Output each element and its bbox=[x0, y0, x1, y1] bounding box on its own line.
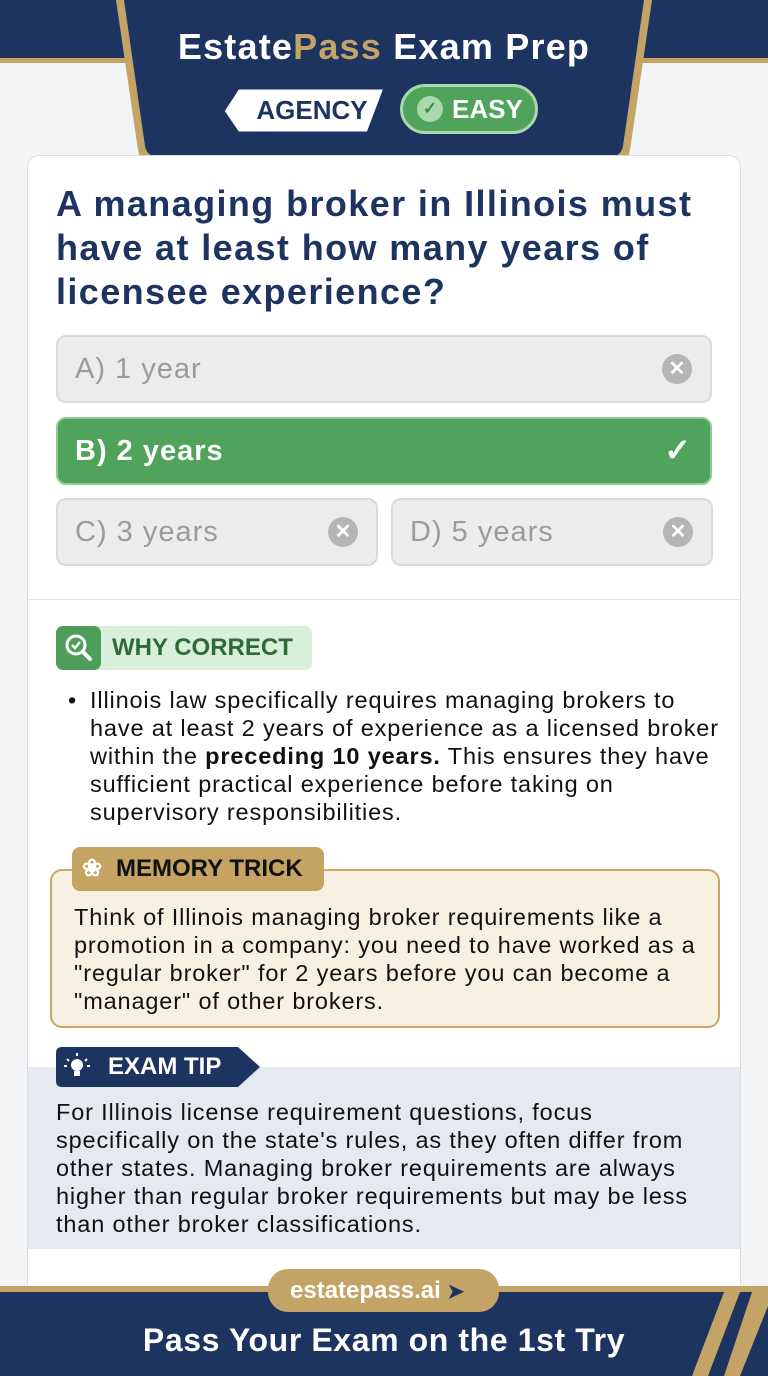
footer url pill: estatepass.ai ➤ bbox=[290, 1277, 464, 1304]
tag: agency: AGENCY bbox=[256, 95, 368, 125]
exam tip section: higher than regular broker requirements but may be less bbox=[56, 1183, 688, 1209]
option B correct: ✓ bbox=[664, 432, 692, 468]
exam tip section: than other broker classifications. bbox=[56, 1211, 422, 1237]
option A: ✕ bbox=[669, 358, 685, 380]
why correct text: within the preceding 10 years. This ensures they have bbox=[90, 743, 709, 769]
question: licensee experience? bbox=[56, 271, 446, 312]
memory trick badge bbox=[72, 847, 324, 891]
why correct text: sufficient practical experience before taking on bbox=[90, 771, 614, 797]
card bbox=[27, 155, 741, 1295]
option C: ✕ bbox=[335, 521, 351, 543]
question bbox=[56, 183, 692, 312]
footer tagline: Pass Your Exam on the 1st Try bbox=[143, 1322, 625, 1358]
tag: easy: EASY bbox=[452, 94, 523, 124]
tag: easy bbox=[400, 84, 538, 134]
option D bbox=[391, 498, 713, 566]
memory trick box: promotion in a company: you need to have worked as a bbox=[74, 932, 696, 958]
option D: D) 5 years bbox=[410, 516, 554, 548]
memory trick badge: MEMORY TRICK bbox=[116, 855, 303, 882]
option C: C) 3 years bbox=[75, 516, 219, 548]
option A bbox=[56, 335, 712, 403]
why correct badge bbox=[56, 626, 312, 670]
option A: A) 1 year bbox=[75, 352, 202, 384]
card: • bbox=[68, 687, 77, 713]
exam tip badge bbox=[56, 1047, 260, 1087]
question: A managing broker in Illinois must bbox=[56, 183, 692, 224]
exam tip section: other states. Managing broker requirements are always bbox=[56, 1155, 676, 1181]
question: have at least how many years of bbox=[56, 227, 650, 268]
memory trick badge: ❀ bbox=[82, 855, 102, 882]
why correct text: have at least 2 years of experience as a licensed broker bbox=[90, 715, 719, 741]
exam tip badge: EXAM TIP bbox=[108, 1053, 221, 1080]
memory trick box: Think of Illinois managing broker requirements like a bbox=[74, 904, 662, 930]
header band bbox=[0, 0, 768, 155]
title: EstatePass Exam Prep bbox=[178, 26, 590, 67]
why correct text: supervisory responsibilities. bbox=[90, 799, 402, 825]
option B correct: B) 2 years bbox=[75, 434, 224, 466]
footer url pill bbox=[268, 1269, 499, 1312]
memory trick box bbox=[50, 869, 720, 1028]
footer band bbox=[0, 1286, 768, 1376]
why correct text bbox=[68, 687, 719, 825]
memory trick box: "manager" of other brokers. bbox=[74, 988, 384, 1014]
why correct text: Illinois law specifically requires managing brokers to bbox=[90, 687, 675, 713]
option C bbox=[56, 498, 378, 566]
exam tip section bbox=[28, 1067, 740, 1249]
tag: easy: ✓ bbox=[423, 99, 437, 118]
option D: ✕ bbox=[670, 521, 686, 543]
why correct badge: WHY CORRECT bbox=[112, 634, 293, 661]
tag: agency bbox=[224, 90, 383, 132]
option B correct bbox=[56, 417, 712, 485]
exam tip section: For Illinois license requirement questions, focus bbox=[56, 1099, 593, 1125]
memory trick box: "regular broker" for 2 years before you can become a bbox=[74, 960, 670, 986]
exam tip section: specifically on the state's rules, as they often differ from bbox=[56, 1127, 683, 1153]
